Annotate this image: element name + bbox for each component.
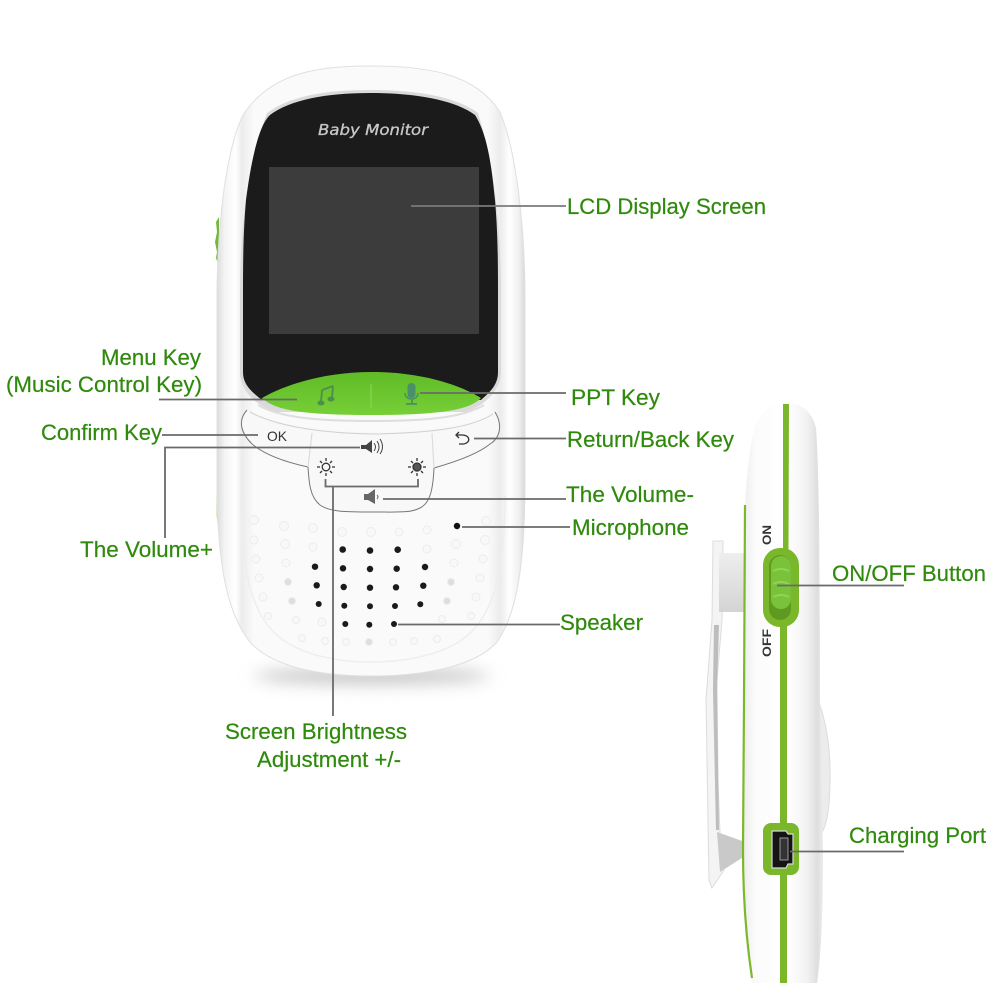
ON label: ON xyxy=(760,525,774,545)
label: The Volume+: The Volume+ xyxy=(80,537,213,562)
microphone hole xyxy=(454,523,460,529)
control pad fill xyxy=(241,410,500,512)
clip upper connector xyxy=(719,553,745,612)
green key panel xyxy=(262,372,481,415)
device shadow xyxy=(254,668,490,684)
leader line: speaker xyxy=(398,624,560,626)
label: Confirm Key: Confirm Key xyxy=(41,420,162,445)
rear bulge of monitor xyxy=(815,700,830,832)
label: Music Control Key: (Music Control Key) xyxy=(6,372,202,397)
leader line: microphone xyxy=(462,526,570,528)
black screen panel xyxy=(243,93,498,400)
brand text: Baby Monitor xyxy=(318,121,429,139)
clip grey inner bar xyxy=(713,625,719,830)
on/off switch housing xyxy=(763,548,799,627)
leader line: charging port xyxy=(790,850,904,852)
decorative dimples xyxy=(250,516,490,646)
slider ridges xyxy=(773,569,789,597)
icon: volume down xyxy=(364,489,378,504)
screen bezel xyxy=(240,90,501,412)
green key divider xyxy=(370,384,372,408)
label: Adjustment: Adjustment +/- xyxy=(257,747,401,772)
label: ON/OFF Button: ON/OFF Button xyxy=(832,561,986,586)
leader line: confirm key xyxy=(162,434,258,436)
label: Return/Back Key: Return/Back Key xyxy=(567,427,734,452)
label: Microphone: Microphone xyxy=(572,515,689,540)
icon: volume up xyxy=(361,439,382,454)
charging port housing xyxy=(763,823,799,875)
icon: music note xyxy=(318,386,334,406)
mini USB port xyxy=(772,831,793,868)
left green edge xyxy=(743,505,752,978)
control pad dividers xyxy=(308,433,434,468)
icon: left side volume button xyxy=(215,217,219,266)
label: The Volume-: The Volume- xyxy=(566,482,694,507)
leader line: LCD xyxy=(411,205,566,207)
label: Menu Key: Menu Key xyxy=(101,345,201,370)
leader line: volume minus xyxy=(383,498,566,500)
leader line: menu key xyxy=(159,398,297,400)
label: LCD Display Screen: LCD Display Screen xyxy=(567,194,766,219)
leader line: on/off xyxy=(777,584,904,586)
leader line: brightness xyxy=(326,479,418,716)
icon: microphone xyxy=(405,383,418,405)
speaker holes xyxy=(312,546,428,628)
front view of baby monitor xyxy=(215,66,525,684)
leader line: return key xyxy=(474,438,566,440)
icon: brightness down xyxy=(317,458,335,476)
side view of baby monitor xyxy=(706,403,830,983)
control pad top rim xyxy=(250,412,493,434)
label: Speaker: Speaker xyxy=(560,610,643,635)
green centre strip xyxy=(780,404,789,983)
icon: brightness up xyxy=(408,458,426,476)
OK key label: OK xyxy=(267,428,288,444)
lower bezel arc xyxy=(258,405,484,421)
on/off switch track xyxy=(769,555,791,620)
label: Screen Brightness: Screen Brightness xyxy=(225,719,407,744)
leader line: PPT key xyxy=(420,392,566,394)
leader line: volume plus xyxy=(165,448,360,538)
LCD display xyxy=(269,167,479,334)
on/off slider xyxy=(771,556,791,609)
side body xyxy=(743,403,823,983)
belt clip plate xyxy=(706,541,724,888)
inner body contour xyxy=(241,495,505,662)
icon: return arrow xyxy=(456,432,469,444)
USB connector detail xyxy=(780,838,788,860)
OFF label: OFF xyxy=(760,629,774,657)
device body xyxy=(217,66,525,676)
clip lower connector xyxy=(717,832,745,872)
control pad outline xyxy=(241,410,500,512)
label: Charging Port: Charging Port xyxy=(849,823,986,848)
left side green edge xyxy=(216,485,220,527)
label: PPT Key: PPT Key xyxy=(571,385,660,410)
